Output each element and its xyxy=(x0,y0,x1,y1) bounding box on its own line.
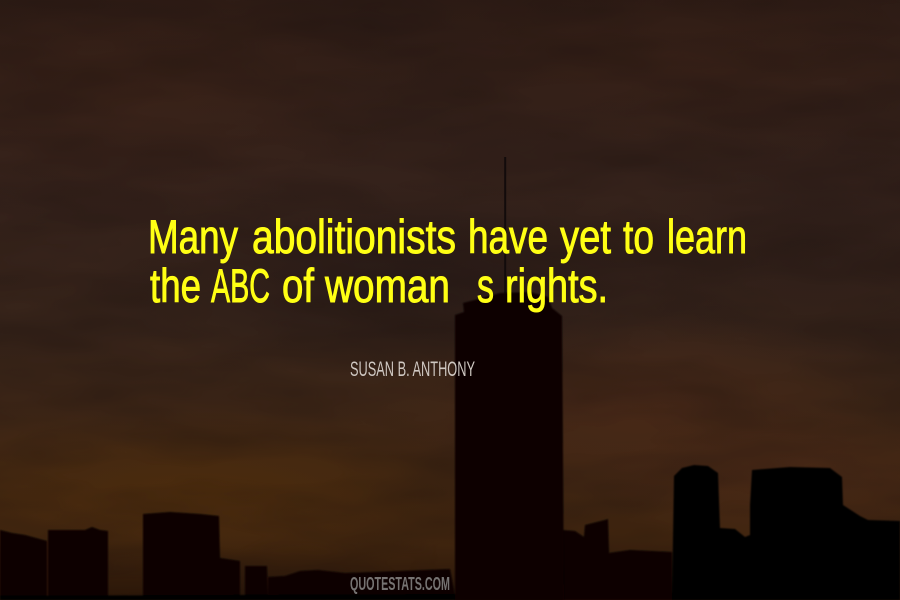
quote line 1: have xyxy=(468,210,548,263)
website credit: QUOTESTATS.COM xyxy=(350,574,450,594)
quote line 2: woman xyxy=(324,259,450,312)
central tower with antenna xyxy=(455,157,564,600)
quote line 2 xyxy=(150,259,608,312)
quote line 1: abolitionists xyxy=(252,210,456,263)
quote line 2: of xyxy=(282,259,315,312)
right buildings xyxy=(562,519,672,600)
low hill xyxy=(268,569,456,600)
left buildings xyxy=(0,530,47,600)
quote line 1: Many xyxy=(148,210,238,263)
city skyline silhouette xyxy=(0,465,900,600)
quote line 2: the xyxy=(150,259,201,312)
quote line 1: learn xyxy=(667,210,747,263)
quote line 2: ABC xyxy=(211,259,270,312)
quote line 1: yet xyxy=(560,210,611,263)
quote line 2: rights. xyxy=(505,259,608,312)
author name: SUSAN B. ANTHONY xyxy=(350,358,475,381)
quote line 1: to xyxy=(623,210,654,263)
quote line 1 xyxy=(148,210,747,263)
quote text xyxy=(148,210,747,312)
quote line 2: s xyxy=(477,259,494,312)
